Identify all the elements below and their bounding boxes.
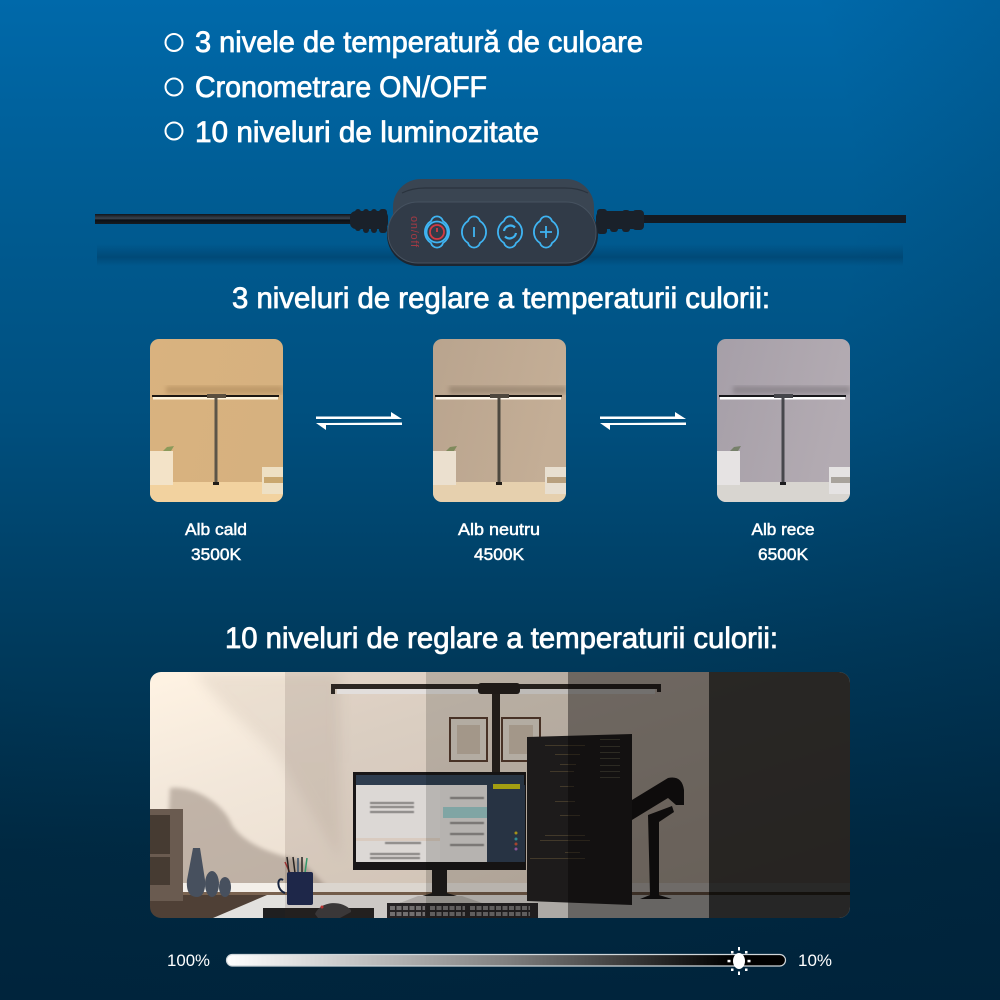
mouse pad and mouse xyxy=(263,903,374,918)
label: warm white: Alb cald xyxy=(185,520,247,539)
arrows: warm to neutral xyxy=(316,412,402,430)
label: cool white xyxy=(752,520,814,564)
label: cool white: 6500K xyxy=(758,545,809,564)
lamp xyxy=(331,683,661,774)
controller front face xyxy=(387,202,598,266)
heading: color temperature: 3 niveluri de reglare a temperaturii culorii: xyxy=(232,282,770,315)
slider track xyxy=(226,954,786,966)
label: neutral white: Alb neutru xyxy=(458,520,540,539)
button: plus xyxy=(534,216,558,248)
inline remote controller with cable xyxy=(95,179,906,266)
label: warm white xyxy=(185,520,247,564)
label: warm white: 3500K xyxy=(191,545,242,564)
photo: neutral white lamp xyxy=(433,339,566,502)
mug with pencils xyxy=(278,857,313,905)
icon: sun handle xyxy=(728,947,750,975)
arrows: neutral to cool xyxy=(600,412,686,430)
cable right xyxy=(640,215,906,223)
wall shadow xyxy=(165,788,330,890)
label: neutral white xyxy=(458,520,540,564)
picture frame left xyxy=(449,717,488,762)
brightness slider xyxy=(167,947,832,975)
keyboard xyxy=(387,903,538,918)
button: mode cycle xyxy=(498,216,522,248)
button: power xyxy=(425,216,449,248)
strain relief left xyxy=(350,209,388,233)
button: minus xyxy=(462,216,486,248)
photo: warm white lamp xyxy=(150,339,283,502)
photo: desk scene with brightness bands xyxy=(150,672,850,918)
monitor arm xyxy=(632,778,684,899)
shelf xyxy=(150,809,183,901)
label: neutral white: 4500K xyxy=(474,545,525,564)
bullet: timer: Cronometrare ON/OFF xyxy=(195,71,487,104)
label: cool white: Alb rece xyxy=(752,520,814,539)
horizontal monitor xyxy=(353,772,526,903)
on/off label: on/off xyxy=(408,216,420,248)
feature list xyxy=(166,26,643,149)
bullet: temperature levels: 3 nivele de temperatură de culoare xyxy=(195,26,643,59)
controller back shell xyxy=(393,179,594,249)
vertical monitor xyxy=(527,734,632,905)
vases xyxy=(187,848,231,897)
label: 100%: 100% xyxy=(167,951,210,970)
wall xyxy=(150,672,850,897)
bullet: brightness levels: 10 niveluri de luminozitate xyxy=(195,116,539,149)
baseboard xyxy=(183,883,709,892)
strain relief right xyxy=(596,209,644,234)
label: 10%: 10% xyxy=(798,951,832,970)
photo: cool white lamp xyxy=(717,339,850,502)
brightness band overlays xyxy=(285,672,850,918)
floor and desk xyxy=(150,895,280,918)
cable left xyxy=(95,214,353,224)
picture frame right xyxy=(501,717,541,762)
heading: brightness levels: 10 niveluri de reglare a temperaturii culorii: xyxy=(225,622,778,655)
